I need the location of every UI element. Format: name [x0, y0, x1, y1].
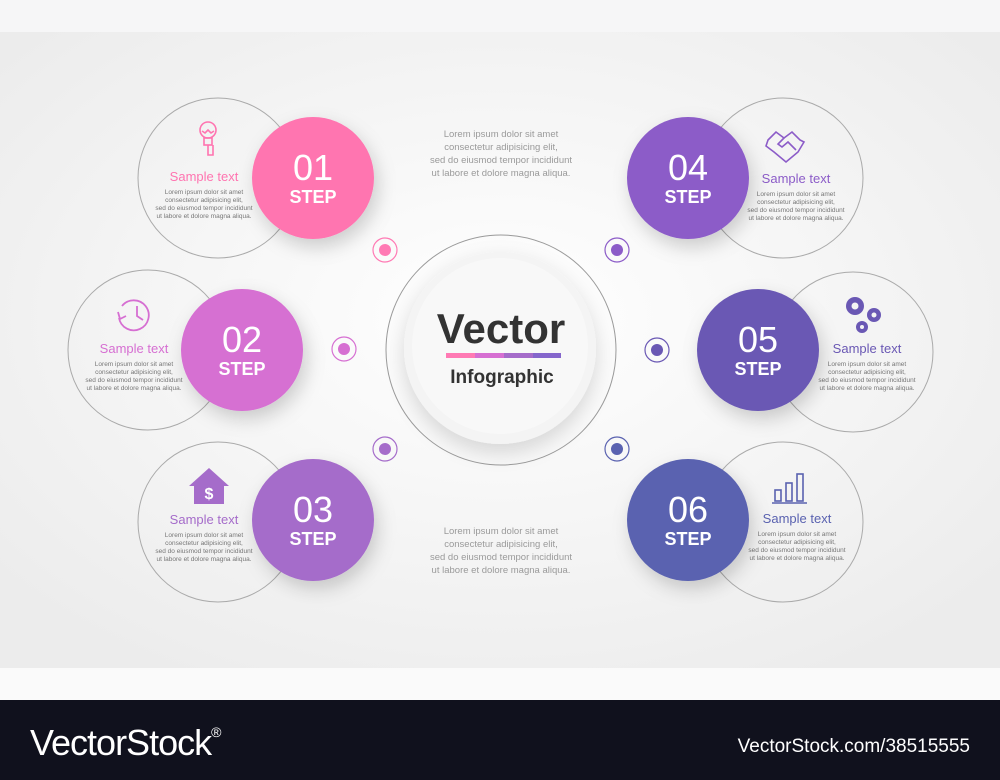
step 05: 05	[738, 319, 778, 360]
footer bar	[0, 700, 1000, 780]
step 03: ut labore et dolore magna aliqua.	[156, 556, 252, 563]
step 06	[627, 442, 863, 602]
step 02: Sample text	[100, 341, 169, 356]
text block: bottom lorem	[430, 526, 572, 576]
step 05: Lorem ipsum dolor sit amet	[828, 361, 906, 368]
step 04: STEP	[664, 187, 712, 207]
step 06: 06	[668, 489, 708, 530]
text block: top lorem: Lorem ipsum dolor sit amet	[444, 129, 559, 140]
icon: handshake	[766, 132, 804, 162]
text block: bottom lorem: ut labore et dolore magna aliqua.	[432, 565, 570, 576]
step 01: STEP	[289, 187, 337, 207]
title: Vector Infographic: Vector	[437, 305, 565, 352]
connector dots	[332, 238, 669, 461]
icon: house dollar: $	[205, 486, 214, 503]
text block: top lorem: consectetur adipisicing elit,	[444, 142, 558, 153]
step 04	[627, 98, 863, 258]
step 05: sed do eiusmod tempor incididunt	[818, 377, 916, 384]
step 04: Sample text	[762, 171, 831, 186]
step 05: Sample text	[833, 341, 902, 356]
step 02: 02	[222, 319, 262, 360]
footer bar: VectorStock	[30, 722, 211, 763]
text block: bottom lorem: sed do eiusmod tempor incididunt	[430, 552, 572, 563]
text block: top lorem: ut labore et dolore magna aliqua.	[432, 168, 570, 179]
title: Vector Infographic: Infographic	[450, 367, 554, 388]
text block: top lorem: sed do eiusmod tempor incididunt	[430, 155, 572, 166]
footer bar: VectorStock.com/38515555	[738, 736, 970, 757]
step 02	[68, 270, 303, 430]
step 03: sed do eiusmod tempor incididunt	[155, 548, 253, 555]
step 06: Lorem ipsum dolor sit amet	[758, 531, 836, 538]
step 03: Lorem ipsum dolor sit amet	[165, 532, 243, 539]
step 03: consectetur adipisicing elit,	[165, 540, 243, 547]
title: Vector Infographic	[437, 305, 565, 388]
step 04: consectetur adipisicing elit,	[757, 199, 835, 206]
step 04: 04	[668, 147, 708, 188]
step 01: sed do eiusmod tempor incididunt	[155, 205, 253, 212]
step 02: STEP	[218, 359, 266, 379]
icon: clock	[118, 300, 149, 330]
icon: gears	[846, 297, 881, 333]
step 05: consectetur adipisicing elit,	[828, 369, 906, 376]
step 02: consectetur adipisicing elit,	[95, 369, 173, 376]
step 05: ut labore et dolore magna aliqua.	[819, 385, 915, 392]
step 04: ut labore et dolore magna aliqua.	[748, 215, 844, 222]
text block: top lorem	[430, 129, 572, 179]
step 02: Lorem ipsum dolor sit amet	[95, 361, 173, 368]
text block: bottom lorem: Lorem ipsum dolor sit amet	[444, 526, 559, 537]
step 05: STEP	[734, 359, 782, 379]
step 01	[138, 98, 374, 258]
step 01: consectetur adipisicing elit,	[165, 197, 243, 204]
icon: house dollar	[189, 468, 229, 504]
step 03	[138, 442, 374, 602]
step 06: sed do eiusmod tempor incididunt	[748, 547, 846, 554]
step 04: Lorem ipsum dolor sit amet	[757, 191, 835, 198]
step 04: sed do eiusmod tempor incididunt	[747, 207, 845, 214]
step 06: consectetur adipisicing elit,	[758, 539, 836, 546]
step 02: ut labore et dolore magna aliqua.	[86, 385, 182, 392]
step 03: 03	[293, 489, 333, 530]
step 05	[697, 272, 933, 432]
step 01: ut labore et dolore magna aliqua.	[156, 213, 252, 220]
step 06: ut labore et dolore magna aliqua.	[749, 555, 845, 562]
text block: bottom lorem: consectetur adipisicing elit,	[444, 539, 558, 550]
step 03: STEP	[289, 529, 337, 549]
icon: light bulb	[200, 122, 216, 155]
step 06: STEP	[664, 529, 712, 549]
step 02: sed do eiusmod tempor incididunt	[85, 377, 183, 384]
step 01: Lorem ipsum dolor sit amet	[165, 189, 243, 196]
step 01: Sample text	[170, 169, 239, 184]
center ring	[386, 235, 616, 465]
step 06: Sample text	[763, 511, 832, 526]
footer bar: ®	[211, 724, 222, 740]
step 01: 01	[293, 147, 333, 188]
icon: bar chart	[772, 474, 807, 503]
step 03: Sample text	[170, 512, 239, 527]
